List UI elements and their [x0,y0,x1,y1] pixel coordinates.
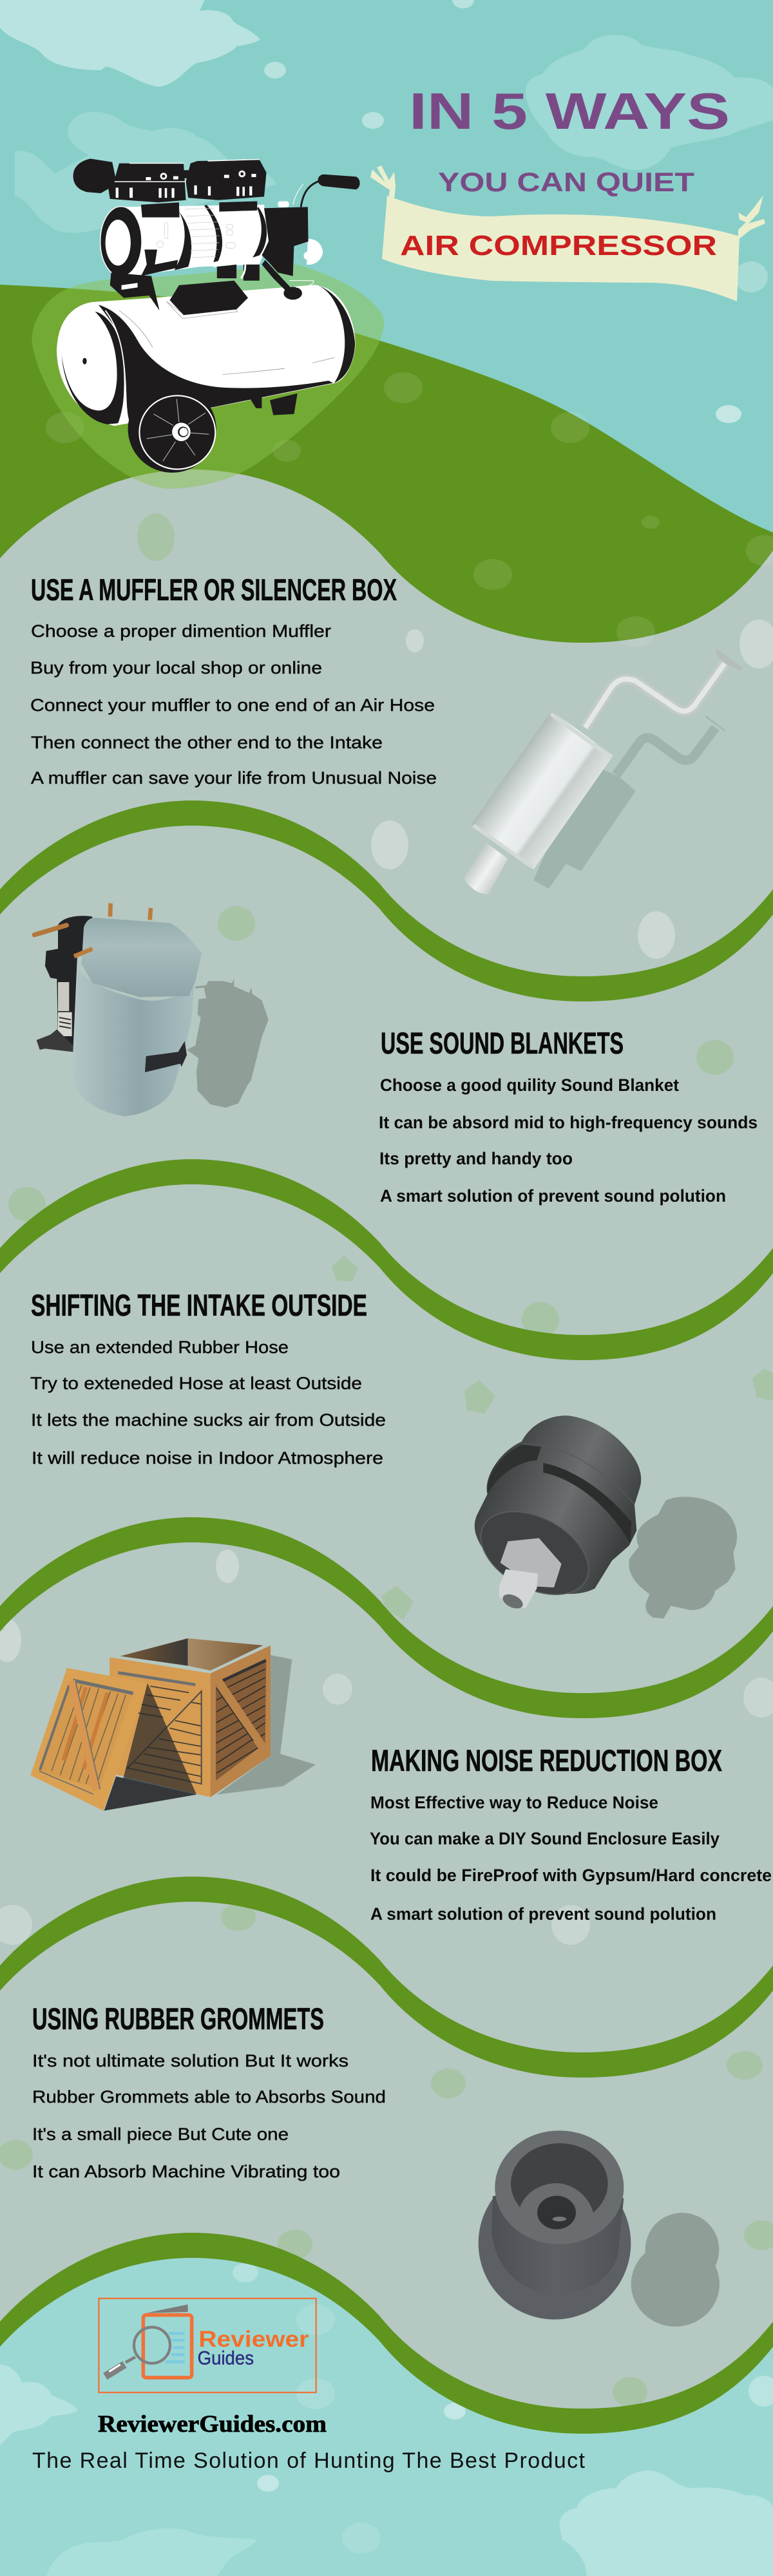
image: muffler with shadow [464,649,743,894]
compressor feet [251,393,298,415]
grommet collar [491,2196,624,2295]
banner text: air compressor: AIR COMPRESSOR [400,230,717,261]
grommet flange [479,2167,631,2320]
muffler end flanges [473,714,611,867]
crate lid panel [39,1679,133,1789]
wave ribbon 3 [0,1517,773,1718]
crate front face [110,1657,211,1797]
green halo behind compressor [32,264,384,489]
crate front slats [118,1672,202,1784]
filter thread hole [501,1591,525,1611]
wave ribbon 5 [0,2233,773,2434]
copper stubs [74,904,151,956]
section 5: rubber grommets text: Rubber Grommets able to Absorbs Sound [32,2087,386,2107]
icon: air compressor illustration [57,158,360,473]
logo magnifier [105,2327,170,2376]
section 1: muffler text: Then connect the other end to the Intake [31,733,383,752]
muffler body [472,710,613,869]
section 3: intake text [30,1288,386,1468]
compressor labels [58,982,72,1036]
filter rim left [487,1444,541,1494]
lid shadow on crate [122,1683,196,1795]
section 5: rubber grommets text: It's not ultimate solution But It works [32,2051,348,2070]
footer: tagline: The Real Time Solution of Hunting The Best Product [32,2448,586,2473]
image: wooden crate [30,1638,316,1811]
green hill [0,285,773,657]
crate lid [30,1668,148,1811]
teal footer background [0,2258,773,2576]
muffler tail pipe [464,842,508,894]
heading: SHIFTING THE INTAKE OUTSIDE [31,1288,367,1322]
section 2: sound blankets text: Its pretty and handy too [379,1149,573,1168]
crate side panel [216,1660,266,1781]
logo wordmark: Guides: Guides [198,2348,254,2369]
section 5: rubber grommets text: It's a small piece But Cute one [32,2125,289,2144]
grey content background [0,469,773,2447]
section 2: sound blankets text: It can be absord mid to high-frequency sounds [379,1113,758,1132]
sky background [0,0,773,644]
compressor capacitor and supports [110,249,314,319]
section 4: noise box text [370,1743,772,1924]
crate lid brace [72,1681,96,1790]
logo wordmark: Reviewer: Reviewer [198,2327,309,2352]
compressor foot [37,1029,73,1052]
section 4: noise box text: Most Effective way to Reduce Noise [370,1793,658,1812]
filter base face [467,1495,602,1611]
heading: USE A MUFFLER OR SILENCER BOX [31,573,397,607]
clouds: top sky [0,0,773,233]
crate floor gap [104,1776,196,1811]
compressor motors [100,201,269,276]
section 3: intake text: It will reduce noise in Indoor Atmosphere [32,1448,383,1468]
section 3: intake text: Use an extended Rubber Hose [31,1338,289,1357]
logo book flap [146,2304,188,2313]
clouds: footer [0,2364,773,2576]
blanket cover cap [82,918,202,997]
banner ribbon [370,166,765,301]
subtitle: you can quiet: YOU CAN QUIET [438,167,694,197]
section 5: rubber grommets text [32,2002,386,2181]
blanket cover lower [73,968,195,1116]
image: rubber grommet with shadow [479,2130,720,2327]
image: sound blanket compressor with shadow [34,904,269,1116]
grommet hole [537,2196,576,2230]
section 1: muffler text: Connect your muffler to one end of an Air Hose [30,696,435,715]
logo frame [99,2298,316,2392]
section 2: sound blankets text: A smart solution of prevent sound polution [380,1186,726,1206]
section 1: muffler text: Choose a proper dimention Muffler [31,621,331,641]
wave ribbon 4 [0,1877,773,2078]
filter shadow [629,1497,737,1618]
blanket strap [145,1041,187,1072]
blanket shadow [187,979,269,1108]
compressor shell [45,916,92,1052]
heading: USING RUBBER GROMMETS [32,2002,324,2036]
grommet shadow [631,2213,720,2327]
muffler shadow [533,716,726,889]
section 3: intake text: It lets the machine sucks air from Outside [31,1410,386,1430]
title: in 5 ways: IN 5 WAYS [409,82,730,140]
section 5: rubber grommets text: It can Absorb Machine Vibrating too [32,2162,340,2181]
section 2: sound blankets text [379,1026,758,1206]
compressor cylinder heads [73,158,267,202]
filter thread [499,1569,538,1609]
filter housing silhouette [475,1416,641,1594]
compressor pressure switch and handle [262,175,360,299]
section 1: muffler text [30,573,437,788]
compressor wheel [128,385,216,473]
grommet inner cavity [511,2143,608,2224]
section 4: noise box text: It could be FireProof with Gypsum/Hard concrete [370,1866,772,1885]
section 4: noise box text: A smart solution of prevent sound polution [370,1904,716,1924]
image: intake filter with shadow [467,1416,737,1618]
crate interior right [188,1638,263,1671]
crate brace [169,1684,202,1719]
logo book [143,2315,192,2378]
footer: website name: ReviewerGuides.com [98,2411,327,2438]
section 2: sound blankets text: Choose a good quility Sound Blanket [380,1075,679,1095]
crate side face [211,1645,271,1797]
wave ribbon 2 [0,1159,773,1360]
filter nut [501,1538,562,1587]
section 3: intake text: Try to exteneded Hose at least Outside [30,1374,362,1393]
crate interior left [120,1638,188,1666]
compressor tank [57,285,355,426]
wave ribbon 1 [0,800,773,1001]
copper pipes [34,925,66,935]
crate shadow [217,1655,316,1795]
section 1: muffler text: Buy from your local shop or online [30,658,322,677]
logo: Reviewer Guides [99,2298,316,2392]
heading: USE SOUND BLANKETS [381,1026,624,1060]
logo text lines [166,2333,185,2362]
muffler pipe [585,663,725,728]
section 1: muffler text: A muffler can save your life from Unusual Noise [31,768,437,788]
section 4: noise box text: You can make a DIY Sound Enclosure Easily [370,1829,720,1848]
muffler flange [716,649,743,670]
filter rim band [543,1463,631,1544]
